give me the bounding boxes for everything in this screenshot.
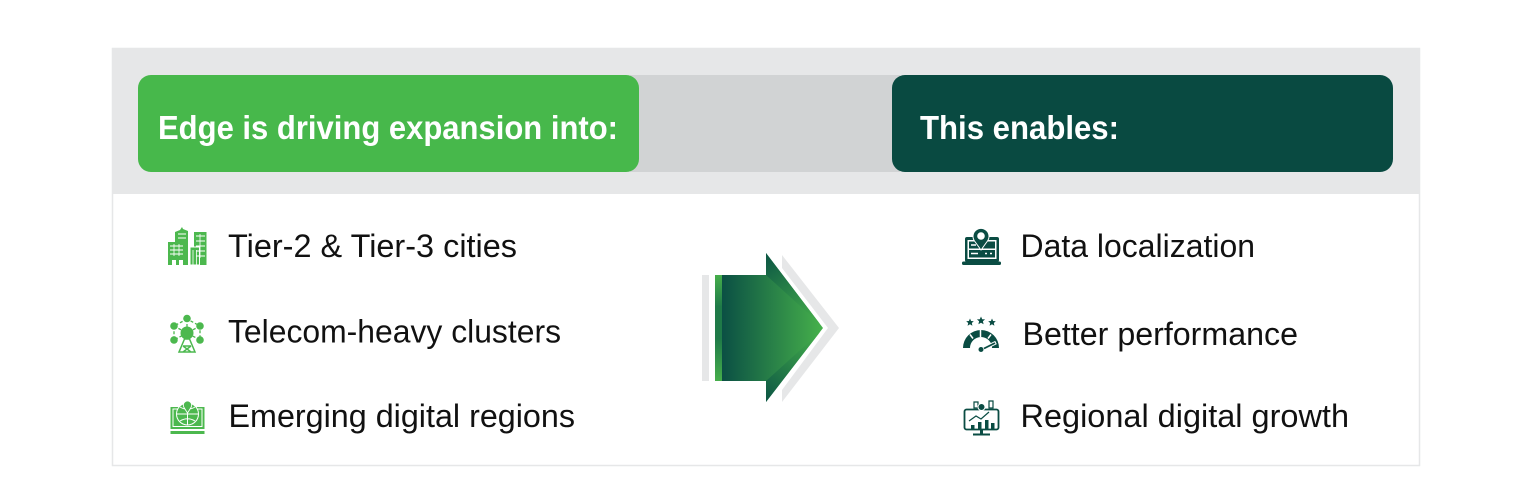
header connector (630, 75, 900, 172)
heading: right: This enables: (920, 109, 1119, 146)
icon: performance gauge with stars (963, 316, 999, 352)
arrow back bar (702, 275, 709, 381)
heading: right (892, 75, 1393, 172)
label: Better performance: Better performance (1022, 316, 1298, 352)
icon: data location laptop (962, 228, 1001, 265)
arrow bottom facet (766, 332, 820, 402)
arrow: transition (702, 253, 839, 402)
arrow back chevron (782, 255, 839, 402)
arrow body (722, 253, 823, 402)
heading: left (138, 75, 639, 172)
panel: main card (112, 48, 1420, 466)
icon: telecom network tower (170, 315, 204, 352)
icon: city buildings (168, 227, 206, 265)
label: Data localization: Data localization (1020, 228, 1255, 264)
label: Emerging digital regions: Emerging digital regions (228, 398, 575, 434)
label: Regional digital growth: Regional digital growth (1020, 398, 1349, 434)
header band (112, 48, 1420, 194)
arrow left strip (715, 275, 722, 381)
label: Telecom-heavy clusters: Telecom-heavy clusters (228, 314, 561, 350)
icon: regional growth dashboard (964, 401, 998, 436)
label: Tier-2 & Tier-3 cities: Tier-2 & Tier-3 cities (228, 228, 517, 264)
icon: laptop with globe (170, 401, 204, 434)
arrow top facet (766, 253, 820, 324)
heading: left: Edge is driving expansion into: (158, 109, 618, 146)
